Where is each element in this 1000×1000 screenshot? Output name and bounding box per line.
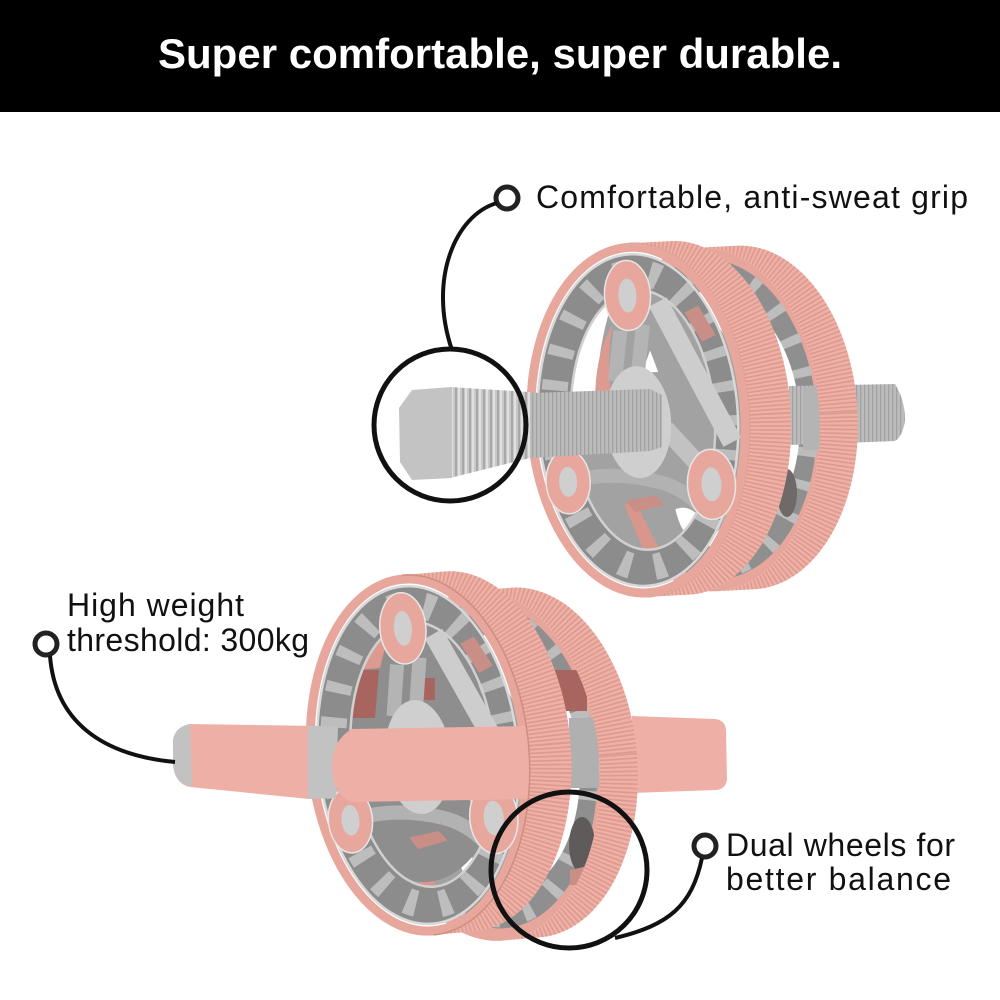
callout: comfortable grip: Comfortable, anti-sweat grip: [536, 179, 968, 215]
callout: dual wheels: Dual wheels for: [726, 827, 955, 863]
title banner: [0, 0, 1000, 112]
callout: dual wheels: [491, 792, 955, 948]
callout: weight threshold: High weight: [67, 587, 244, 623]
callout: weight threshold: threshold: 300kg: [67, 622, 309, 658]
callout: comfortable grip: [374, 179, 968, 501]
product: bottom ab roller with handles: [173, 562, 727, 953]
title banner: Super comfortable, super durable.: [158, 30, 842, 77]
callout: weight threshold: [35, 587, 309, 762]
callout: dual wheels: better balance: [726, 861, 951, 897]
product: top ab roller with threaded axle: [399, 235, 905, 602]
